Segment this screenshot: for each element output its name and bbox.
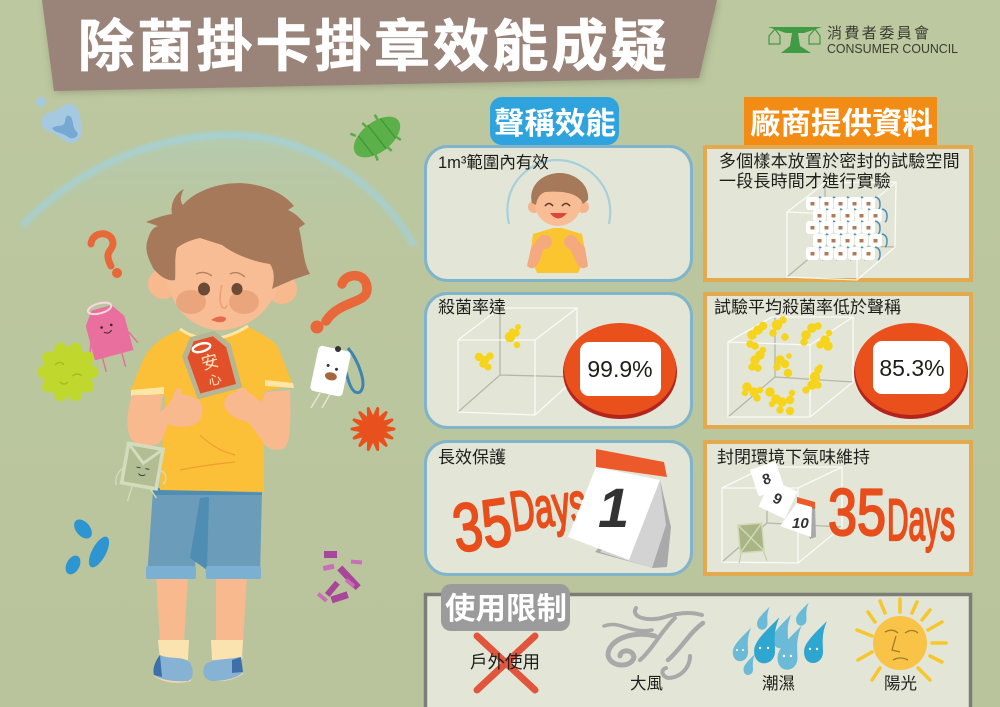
scent charm in cube bbox=[736, 523, 767, 563]
icon: purple bacteria bbox=[317, 551, 362, 603]
panel: average kill rate lower than claimed bbox=[705, 294, 971, 427]
35 days text bbox=[828, 475, 955, 553]
35 days text: Days bbox=[506, 470, 590, 543]
arms and hands bbox=[127, 388, 290, 450]
page 9: 9 bbox=[770, 490, 785, 509]
panel: multiple samples in sealed test space bbox=[705, 147, 971, 280]
35 days text: 35 bbox=[448, 484, 516, 567]
calendar bbox=[568, 449, 671, 568]
limit: outdoor use bbox=[470, 636, 540, 690]
panel label: 封閉環境下氣味維持 bbox=[717, 448, 870, 467]
limit: outdoor use: 戶外使用 bbox=[470, 652, 540, 672]
cube with samples bbox=[787, 182, 896, 280]
shorts bbox=[146, 488, 262, 579]
icon: red virus bbox=[352, 408, 394, 450]
header: manufacturer data bbox=[744, 97, 937, 145]
test kill rate badge: 85.3% bbox=[879, 355, 945, 381]
pink charm character bbox=[77, 296, 143, 375]
illustration: happy boy bbox=[527, 173, 589, 273]
panel label line 2: 一段長時間才進行實驗 bbox=[719, 172, 891, 191]
35 days text bbox=[448, 470, 592, 567]
panel: usage limitations bbox=[426, 584, 970, 707]
hair bbox=[146, 183, 310, 289]
page 10: 10 bbox=[792, 515, 809, 532]
shoes bbox=[153, 655, 243, 683]
limitation heading bbox=[441, 584, 570, 631]
panel label: 1m³範圍內有效 bbox=[438, 153, 549, 172]
head bbox=[148, 232, 297, 330]
cube with few germs bbox=[458, 308, 577, 415]
cube with many germs bbox=[728, 317, 853, 417]
protective dome arc bbox=[18, 132, 418, 270]
panel: long-lasting protection bbox=[426, 442, 692, 574]
header: claimed efficacy: 聲稱效能 bbox=[494, 107, 616, 141]
35 days text: 35 bbox=[828, 475, 886, 549]
header: claimed efficacy bbox=[490, 97, 619, 145]
title: 除菌掛卡掛章效能成疑 bbox=[78, 15, 670, 78]
limit: sunlight bbox=[857, 599, 946, 693]
panel label: 試驗平均殺菌率低於聲稱 bbox=[714, 298, 901, 317]
icon: blue germ bbox=[36, 97, 82, 143]
legs bbox=[156, 575, 247, 642]
calendar pages bbox=[750, 461, 816, 539]
charm text: 安 bbox=[199, 351, 221, 374]
question mark right bbox=[310, 276, 367, 334]
kill rate badge bbox=[563, 323, 677, 419]
panel: kill rate claim bbox=[426, 294, 692, 428]
socks bbox=[158, 640, 243, 660]
question mark left bbox=[91, 234, 122, 278]
limit: sunlight: 陽光 bbox=[884, 674, 917, 693]
test kill rate badge bbox=[854, 323, 968, 419]
page 8: 8 bbox=[760, 470, 773, 489]
icon: yellow-green virus bbox=[38, 343, 98, 401]
calendar number: 1 bbox=[598, 476, 629, 539]
logo text: 消費者委員會 bbox=[827, 25, 931, 42]
logo english: CONSUMER COUNCIL bbox=[827, 41, 958, 56]
label: humidity: 潮濕 bbox=[762, 674, 795, 693]
cube bbox=[722, 467, 842, 563]
panel label: 長效保護 bbox=[438, 448, 506, 467]
green envelope charm character bbox=[113, 442, 171, 507]
shirt bbox=[130, 326, 294, 492]
white card character bbox=[310, 345, 363, 408]
icon: blue bacteria bbox=[63, 516, 113, 577]
title banner bbox=[42, 0, 718, 92]
panel label: 多個樣本放置於密封的試驗空間 bbox=[719, 152, 960, 171]
limitation heading: 使用限制 bbox=[445, 592, 567, 626]
illustration: worried boy bbox=[127, 183, 310, 683]
charm text 2: 心 bbox=[207, 371, 223, 389]
icon: scale bbox=[768, 27, 822, 53]
panel: scent lasts in sealed environment bbox=[705, 442, 971, 574]
limit: strong wind: 大風 bbox=[630, 674, 663, 693]
red charm on shirt bbox=[179, 329, 241, 399]
limit: humidity bbox=[733, 603, 827, 675]
icon: green bacterium bbox=[343, 105, 411, 169]
panel label: 殺菌率達 bbox=[438, 298, 506, 317]
header: manufacturer data: 廠商提供資料 bbox=[750, 106, 933, 141]
panel: effective within 1 cubic metre bbox=[426, 146, 692, 280]
kill rate badge: 99.9% bbox=[587, 356, 653, 382]
limit: strong wind bbox=[604, 608, 703, 693]
protective arc bbox=[507, 160, 610, 224]
logo: Consumer Council bbox=[768, 25, 958, 56]
